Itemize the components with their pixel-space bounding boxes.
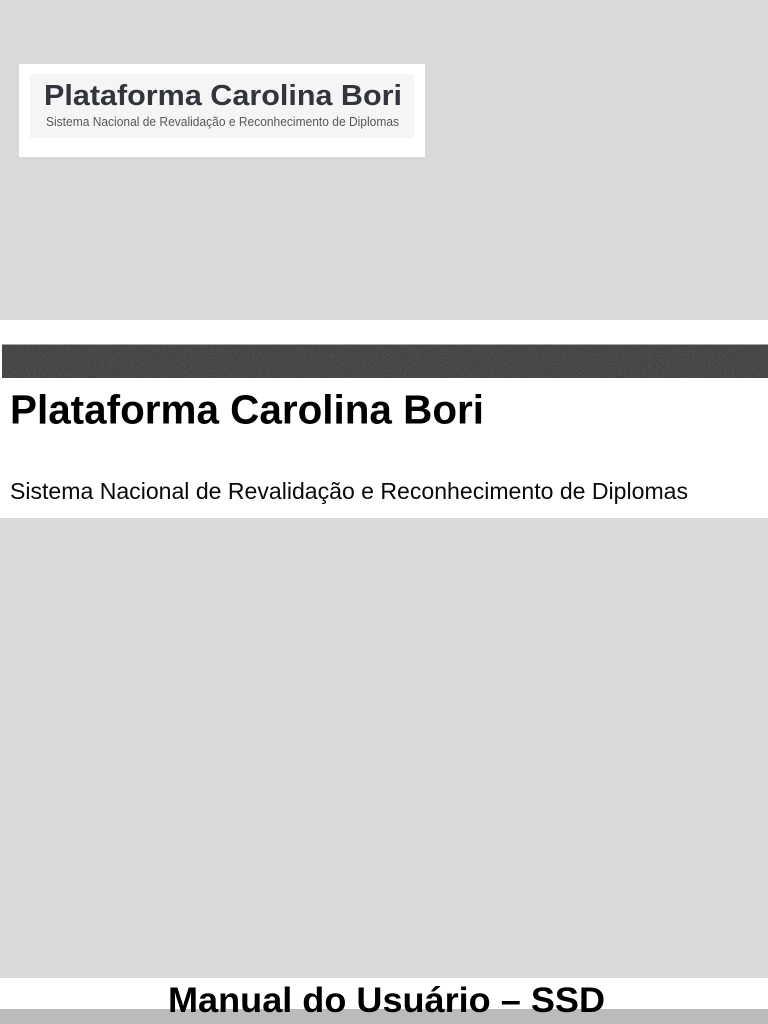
manual title: Manual do Usuário – SSD — [168, 981, 605, 1020]
subtitle: Sistema Nacional de Revalidação e Reconhecimento de Diplomas — [10, 478, 688, 504]
logo panel — [19, 64, 425, 157]
dark header bar — [2, 344, 768, 378]
main title: Plataforma Carolina Bori — [10, 386, 484, 432]
footer band — [0, 978, 768, 1024]
logo subtitle: Sistema Nacional de Revalidação e Reconhecimento de Diplomas — [46, 114, 399, 129]
title band — [0, 320, 768, 518]
logo title: Plataforma Carolina Bori — [44, 80, 402, 112]
